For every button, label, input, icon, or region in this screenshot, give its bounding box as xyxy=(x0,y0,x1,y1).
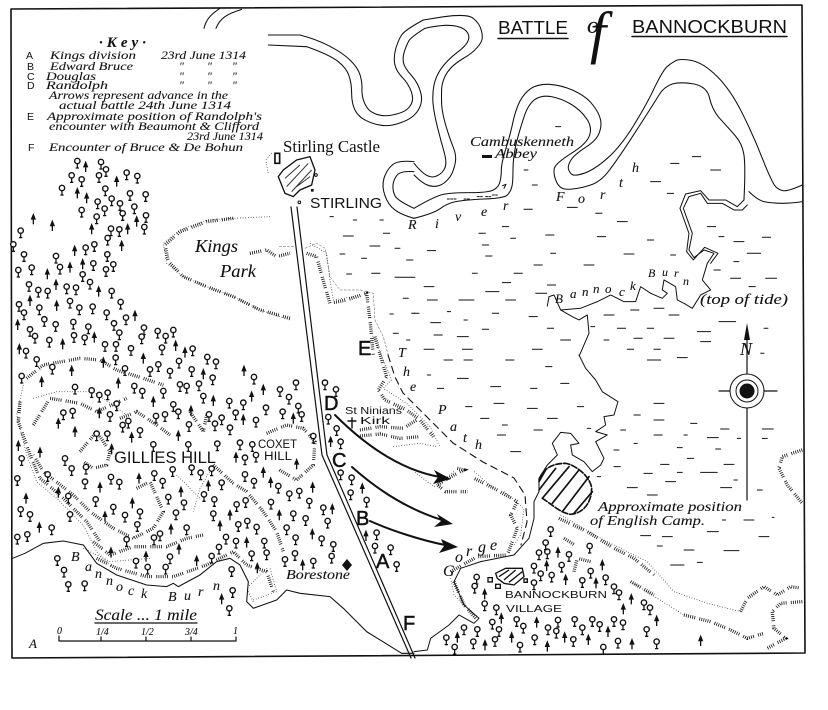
division letters: E xyxy=(358,338,371,360)
battle advance arrows xyxy=(335,415,458,553)
misc marks: diamond at Borestone xyxy=(342,559,352,571)
place labels: Stirling Castle xyxy=(283,137,380,156)
place labels: Abbey xyxy=(494,147,538,162)
Bannock Burn tidal reach xyxy=(547,191,747,355)
key: Douglas xyxy=(45,71,97,83)
place labels: GILLIES HILL xyxy=(114,448,216,467)
marsh north east xyxy=(414,127,777,353)
key: Kings division xyxy=(49,50,136,62)
compass and north arrow: N xyxy=(739,339,753,359)
scale bar: 1/2 xyxy=(141,627,154,638)
key: C xyxy=(27,71,35,83)
title: BANNOCKBURN xyxy=(632,17,787,37)
River Forth west part xyxy=(204,8,425,218)
place labels: Bannock xyxy=(71,550,148,602)
key: encounter with Beaumont & Clifford xyxy=(49,121,259,133)
key: " xyxy=(179,80,184,92)
division letters: A xyxy=(376,551,390,573)
title xyxy=(498,0,787,65)
place labels: BANNOCKBURN xyxy=(505,589,607,601)
place labels: ThePath xyxy=(398,346,482,453)
key: Edward Bruce xyxy=(49,61,133,73)
scale bar: 3/4 xyxy=(184,627,198,638)
key: D xyxy=(27,80,35,92)
place labels: COXET xyxy=(258,439,297,451)
Stirling town xyxy=(266,153,317,204)
key: E xyxy=(27,111,34,123)
scale bar: A xyxy=(28,636,37,651)
key: A xyxy=(26,50,33,62)
division letters: D xyxy=(324,393,338,415)
title: f xyxy=(590,0,613,65)
scale bar: 1 xyxy=(233,626,238,637)
title: o xyxy=(587,13,599,39)
scale bar: Scale ... 1 mile xyxy=(95,607,197,624)
key: Encounter of Bruce & De Bohun xyxy=(48,142,243,154)
arrow: Edward Bruce xyxy=(370,521,458,553)
place labels: Approximate position xyxy=(597,500,742,515)
road from Stirling xyxy=(291,207,415,658)
place labels: STIRLING xyxy=(310,196,382,212)
place labels: Bannock xyxy=(555,278,636,306)
marsh west of the burn xyxy=(330,217,415,340)
compass and north arrow xyxy=(719,323,777,500)
title: BATTLE xyxy=(498,18,568,38)
key: " xyxy=(179,71,184,83)
key: B xyxy=(27,61,34,73)
key xyxy=(26,35,263,154)
key: Approximate position of Randolph's xyxy=(46,111,263,123)
place labels: Forth xyxy=(555,161,639,207)
Bannockburn village xyxy=(488,568,527,588)
place labels: St Ninians xyxy=(345,405,402,417)
scale bar: 1/4 xyxy=(96,627,109,638)
scale bar: 0 xyxy=(57,626,62,637)
arrow: Randolph xyxy=(335,415,451,484)
key: " xyxy=(232,80,237,92)
hachures: Kings Park xyxy=(163,217,373,355)
marsh south east xyxy=(427,358,774,565)
marsh ground marks xyxy=(330,127,777,565)
place labels: Burn xyxy=(648,265,689,288)
key: " xyxy=(207,61,212,73)
hachures: gorge and east slopes xyxy=(414,450,802,648)
division letters: C xyxy=(332,450,346,472)
hachures: Gillies Hill and Coxet Hill xyxy=(17,358,315,602)
place labels: Kirk xyxy=(360,415,391,427)
woodland: conifers xyxy=(18,166,701,646)
place labels: (top of tide) xyxy=(700,292,788,308)
key: " xyxy=(179,61,184,73)
woodland: round trees xyxy=(13,162,657,648)
Bannock Burn south and gorge xyxy=(414,355,618,652)
division letters: B xyxy=(356,508,369,530)
key: " xyxy=(232,61,237,73)
key: ·Key· xyxy=(99,35,146,51)
arrow: Douglas xyxy=(352,467,453,527)
key: " xyxy=(232,71,237,83)
place labels: River xyxy=(407,199,509,233)
key: F xyxy=(28,142,34,154)
place labels: Burn xyxy=(168,579,220,605)
place labels: Park xyxy=(219,261,257,281)
place labels: Gorge xyxy=(443,537,497,580)
place labels: of English Camp. xyxy=(590,514,705,529)
place labels: Cambuskenneth xyxy=(470,135,574,150)
hill hachures xyxy=(17,217,802,648)
hachures: St Ninians hill and the slopes by the gorge xyxy=(360,333,440,447)
scale bar xyxy=(28,607,238,651)
Bannock Burn west xyxy=(13,541,414,653)
key: actual battle 24th June 1314 xyxy=(59,100,231,112)
key: Arrows represent advance in the xyxy=(48,90,228,102)
The Path dashed track xyxy=(279,243,527,545)
key: Randolph xyxy=(45,80,108,92)
division letters: F xyxy=(403,613,415,635)
place labels: Borestone xyxy=(286,568,350,583)
place labels xyxy=(71,135,788,615)
River Forth east part xyxy=(414,15,802,218)
key: " xyxy=(207,80,212,92)
key: " xyxy=(207,71,212,83)
place labels: Kings xyxy=(194,236,238,256)
division letters xyxy=(324,338,415,635)
English camp hatched circle xyxy=(539,463,592,514)
place labels: HILL xyxy=(264,451,293,463)
place labels: VILLAGE xyxy=(506,603,562,615)
key: 23rd June 1314 xyxy=(187,131,263,143)
key: 23rd June 1314 xyxy=(161,50,246,62)
